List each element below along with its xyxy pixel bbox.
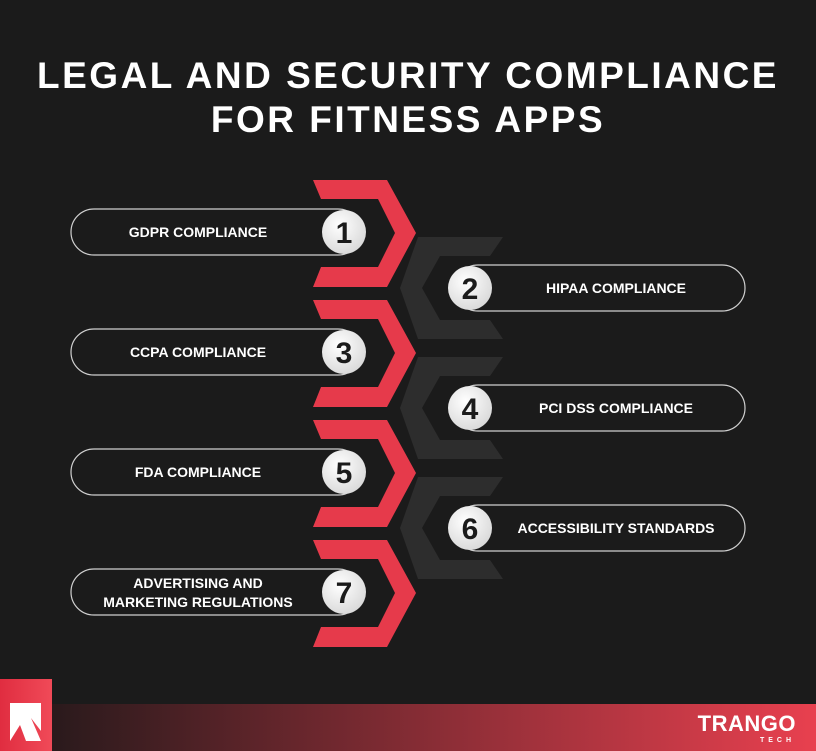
item 5 bbox=[71, 449, 366, 495]
item 7: MARKETING REGULATIONS bbox=[103, 594, 293, 610]
logo square bbox=[0, 679, 52, 751]
footer bar bbox=[52, 704, 816, 751]
chevron: red 1 bbox=[313, 180, 416, 287]
item 1: 1 bbox=[336, 217, 352, 250]
chevron: red 7 bbox=[313, 540, 416, 647]
item 5: 5 bbox=[336, 457, 352, 490]
title: LEGAL AND SECURITY COMPLIANCE bbox=[37, 55, 779, 96]
item 1 bbox=[71, 209, 366, 255]
brand logo: TRANGO bbox=[698, 711, 796, 736]
item 2: HIPAA COMPLIANCE bbox=[546, 280, 686, 296]
chevron: red 3 bbox=[313, 300, 416, 407]
item 7 bbox=[71, 569, 366, 615]
chevron: gray 6 bbox=[400, 477, 503, 579]
item 3: CCPA COMPLIANCE bbox=[130, 344, 266, 360]
item 7: ADVERTISING AND bbox=[133, 575, 263, 591]
title bbox=[37, 55, 779, 140]
item 2: 2 bbox=[462, 273, 478, 306]
brand logo: TECH bbox=[760, 737, 795, 744]
item 6 bbox=[448, 505, 745, 551]
item 6: ACCESSIBILITY STANDARDS bbox=[517, 520, 715, 536]
title: FOR FITNESS APPS bbox=[211, 99, 605, 140]
item 7: 7 bbox=[336, 577, 352, 610]
item 4: 4 bbox=[462, 393, 479, 426]
item 1: GDPR COMPLIANCE bbox=[129, 224, 267, 240]
chevron: red 5 bbox=[313, 420, 416, 527]
item 4: PCI DSS COMPLIANCE bbox=[539, 400, 693, 416]
item 6: 6 bbox=[462, 513, 478, 546]
chevron: gray 2 bbox=[400, 237, 503, 339]
item 2 bbox=[448, 265, 745, 311]
chevron: gray 4 bbox=[400, 357, 503, 459]
item 3 bbox=[71, 329, 366, 375]
item 3: 3 bbox=[336, 337, 352, 370]
item 5: FDA COMPLIANCE bbox=[135, 464, 261, 480]
item 4 bbox=[448, 385, 745, 431]
